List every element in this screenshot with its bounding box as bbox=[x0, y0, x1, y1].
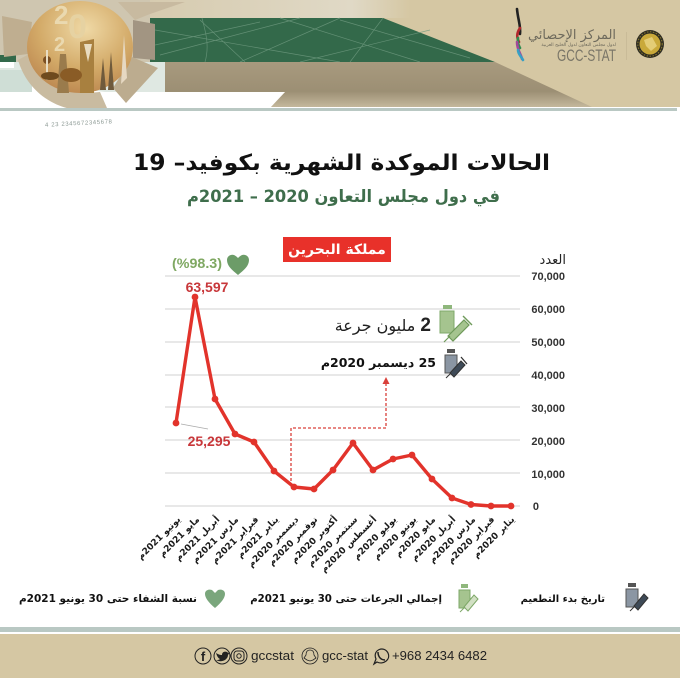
x axis labels: مارس 2021م bbox=[191, 515, 241, 566]
tan band bbox=[165, 62, 592, 107]
x axis labels: فبراير 2021م bbox=[210, 515, 261, 566]
x axis labels: مايو 2021م bbox=[158, 515, 202, 559]
country badge: مملكة البحرين bbox=[288, 242, 386, 258]
footer divider strip bbox=[0, 627, 680, 632]
y axis labels: 50,000 bbox=[531, 337, 565, 349]
total doses callout bbox=[335, 305, 472, 342]
x axis labels: مارس 2020م bbox=[428, 515, 478, 566]
x axis labels: يونيو 2020م bbox=[372, 515, 419, 562]
globe emblem: 2 bbox=[54, 0, 68, 30]
globe emblem: 0 bbox=[68, 8, 87, 46]
x axis labels: أكتوبر 2020م bbox=[288, 514, 340, 566]
legend: recovery rate: نسبة الشفاء حتى 30 يونيو 2021م bbox=[19, 593, 197, 605]
handle: gcc-stat: gcc-stat bbox=[322, 648, 368, 663]
y axis labels: 70,000 bbox=[531, 271, 565, 283]
header divider strip bbox=[0, 108, 677, 111]
logo ribbon bbox=[517, 9, 523, 60]
phone number: +968 2434 6482 bbox=[392, 648, 487, 663]
GCC-STAT logo: المركز الإحصائي bbox=[528, 28, 616, 43]
GCC emblem bbox=[636, 30, 664, 58]
icon: twitter bbox=[214, 648, 230, 664]
country badge bbox=[283, 237, 391, 262]
peak value: 63,597 bbox=[186, 279, 229, 295]
header banner: 4 23 2345672345678 bbox=[45, 119, 113, 129]
icon: snapchat bbox=[302, 648, 318, 664]
vaccination start callout: 25 ديسمبر 2020م bbox=[321, 355, 436, 371]
line chart bbox=[136, 253, 566, 575]
icon: green heart bbox=[227, 255, 249, 275]
y axis labels: العدد bbox=[540, 253, 566, 268]
recovery rate callout: (%98.3) bbox=[172, 255, 222, 271]
legend: total doses bbox=[250, 584, 478, 612]
x axis labels: سبتمبر 2020م bbox=[306, 515, 360, 569]
globe emblem bbox=[2, 0, 185, 111]
x axis labels bbox=[136, 514, 517, 575]
icon: instagram bbox=[231, 648, 247, 664]
x axis labels: يوليو 2020م bbox=[352, 515, 399, 562]
x axis labels: مايو 2020م bbox=[394, 515, 438, 559]
green band bbox=[150, 18, 495, 62]
GCC-STAT logo: GCC-STAT bbox=[557, 46, 616, 65]
legend: vaccination start date: تاريخ بدء التطعيم bbox=[521, 594, 605, 605]
x axis labels: يناير 2020م bbox=[472, 515, 517, 560]
x axis labels: أبريل 2021م bbox=[172, 514, 222, 563]
y axis labels: 40,000 bbox=[531, 370, 565, 382]
legend: vaccination start date bbox=[521, 583, 648, 611]
y axis labels: 10,000 bbox=[531, 469, 565, 481]
legend bbox=[19, 583, 648, 612]
x axis labels: نوفمبر 2020م bbox=[267, 515, 320, 568]
vaccination start callout bbox=[321, 349, 467, 378]
vaccination start arrow bbox=[291, 377, 390, 486]
icon: facebook bbox=[195, 648, 211, 664]
x axis labels: أغسطس 2020م bbox=[318, 514, 379, 575]
subtitle: في دول مجلس التعاون 2020 – 2021م bbox=[187, 187, 500, 207]
x axis labels: يونيو 2021م bbox=[136, 515, 183, 562]
recovery rate callout bbox=[172, 255, 249, 275]
handle: gccstat: gccstat bbox=[251, 648, 294, 663]
header banner bbox=[0, 0, 680, 129]
GCC-STAT logo: لدول مجلس التعاون لدول الخليج العربية bbox=[541, 43, 616, 48]
icon: dark vial and syringe bbox=[445, 349, 467, 378]
footer bbox=[0, 634, 680, 678]
x axis labels: ديسمبر 2020م bbox=[246, 515, 301, 570]
icon: facebook: f bbox=[201, 649, 206, 664]
legend: total doses: إجمالي الجرعات حتى 30 يونيو 2021م bbox=[250, 594, 442, 605]
y axis labels: 20,000 bbox=[531, 436, 565, 448]
GCC-STAT logo bbox=[517, 9, 664, 65]
data line bbox=[173, 294, 514, 509]
latest value bbox=[181, 424, 231, 449]
globe emblem: 2 bbox=[54, 34, 65, 56]
title: الحالات الموكدة الشهرية بكوفيد– 19 bbox=[133, 151, 550, 176]
y axis labels: 60,000 bbox=[531, 304, 565, 316]
x axis labels: يناير 2021م bbox=[236, 515, 281, 560]
icon: green vial and syringe bbox=[440, 305, 472, 342]
x axis labels: فبراير 2020م bbox=[446, 515, 497, 566]
latest value: 25,295 bbox=[188, 433, 231, 449]
grid lines bbox=[165, 276, 520, 506]
legend: recovery rate bbox=[19, 590, 225, 608]
y axis labels: 0 bbox=[533, 501, 539, 513]
icon: whatsapp bbox=[374, 649, 389, 664]
total doses callout: 2 مليون جرعة bbox=[335, 315, 431, 336]
x axis labels: أبريل 2020م bbox=[408, 514, 458, 563]
y axis labels bbox=[531, 253, 566, 513]
y axis labels: 30,000 bbox=[531, 403, 565, 415]
